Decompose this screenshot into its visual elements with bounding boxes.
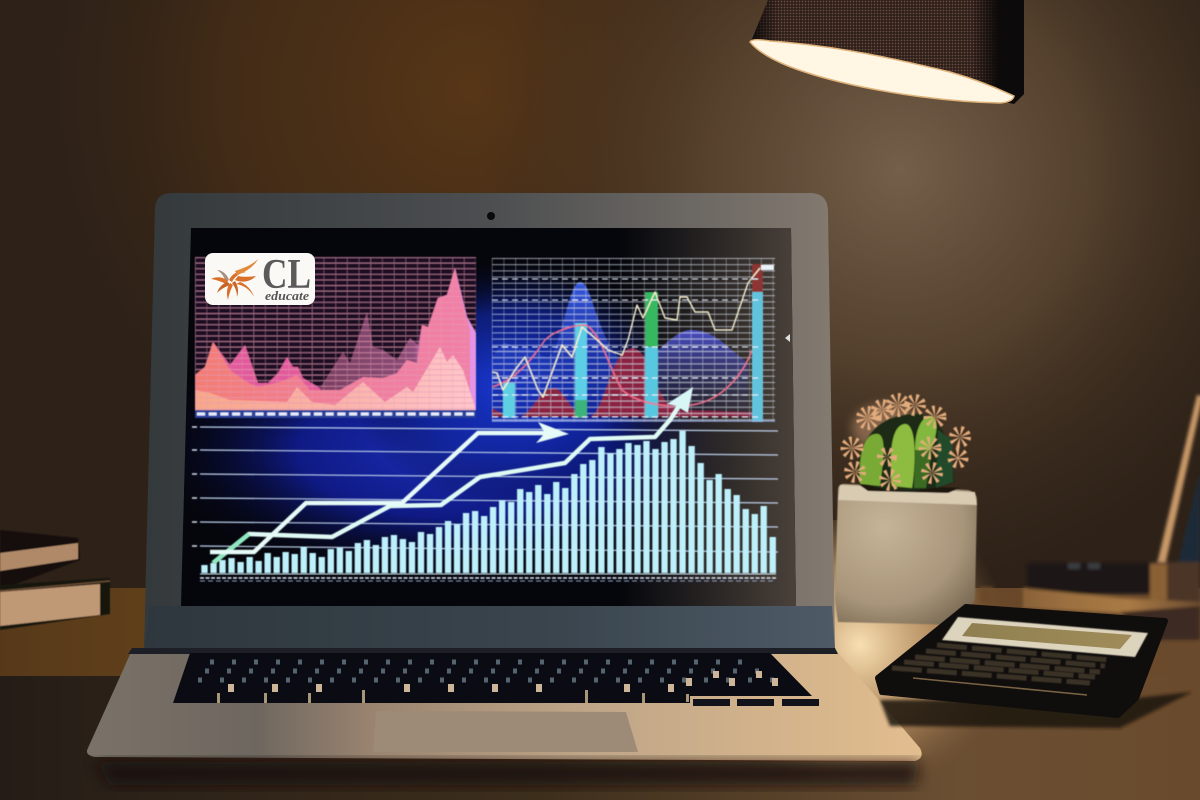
- spines: [846, 399, 965, 485]
- upper book: [0, 530, 80, 590]
- pot: [835, 484, 977, 625]
- books stack: [0, 530, 110, 630]
- screen: [181, 228, 796, 606]
- front highlight: [913, 678, 1087, 695]
- laptop base deck: [87, 648, 922, 761]
- lower book: [0, 578, 110, 630]
- lamp base and stem: [980, 395, 1200, 640]
- lit underside: [750, 40, 1014, 103]
- right combo chart: [492, 258, 775, 422]
- calculator shadow: [880, 692, 1192, 728]
- webcam: [487, 212, 495, 220]
- laptop shadow: [95, 762, 920, 785]
- logo swirl icon: [211, 259, 258, 300]
- cactus plant: [835, 399, 977, 625]
- desk surface: [0, 520, 1200, 800]
- lamp shade: [750, 0, 1024, 104]
- keypad: [892, 645, 1110, 683]
- calculator body: [878, 607, 1165, 715]
- laptop: [87, 193, 922, 761]
- upward arrow line: [213, 387, 693, 563]
- laptop lid: [144, 193, 835, 650]
- plant ribs: [858, 414, 954, 491]
- logo tagline: educate: [265, 288, 309, 303]
- cyan bars: [503, 264, 763, 422]
- pink curve: [492, 325, 752, 406]
- grid lines: [200, 427, 778, 552]
- trackpad: [373, 711, 638, 752]
- display frame: [942, 617, 1148, 657]
- side indicator: [785, 334, 790, 342]
- right arrow line: [210, 422, 569, 552]
- axis tick labels: [192, 427, 197, 546]
- lid lower bezel: [144, 606, 835, 650]
- calculator: [878, 607, 1192, 728]
- left area chart: [195, 257, 476, 418]
- wall background: [0, 0, 1200, 620]
- logo badge: [205, 252, 315, 305]
- keyboard: [173, 653, 819, 706]
- display: [962, 623, 1132, 649]
- bottom bar chart: [192, 387, 778, 581]
- bars: [205, 431, 773, 573]
- logo wordmark: CL: [262, 252, 311, 298]
- spine halo: [852, 404, 920, 452]
- white trend line: [492, 268, 760, 397]
